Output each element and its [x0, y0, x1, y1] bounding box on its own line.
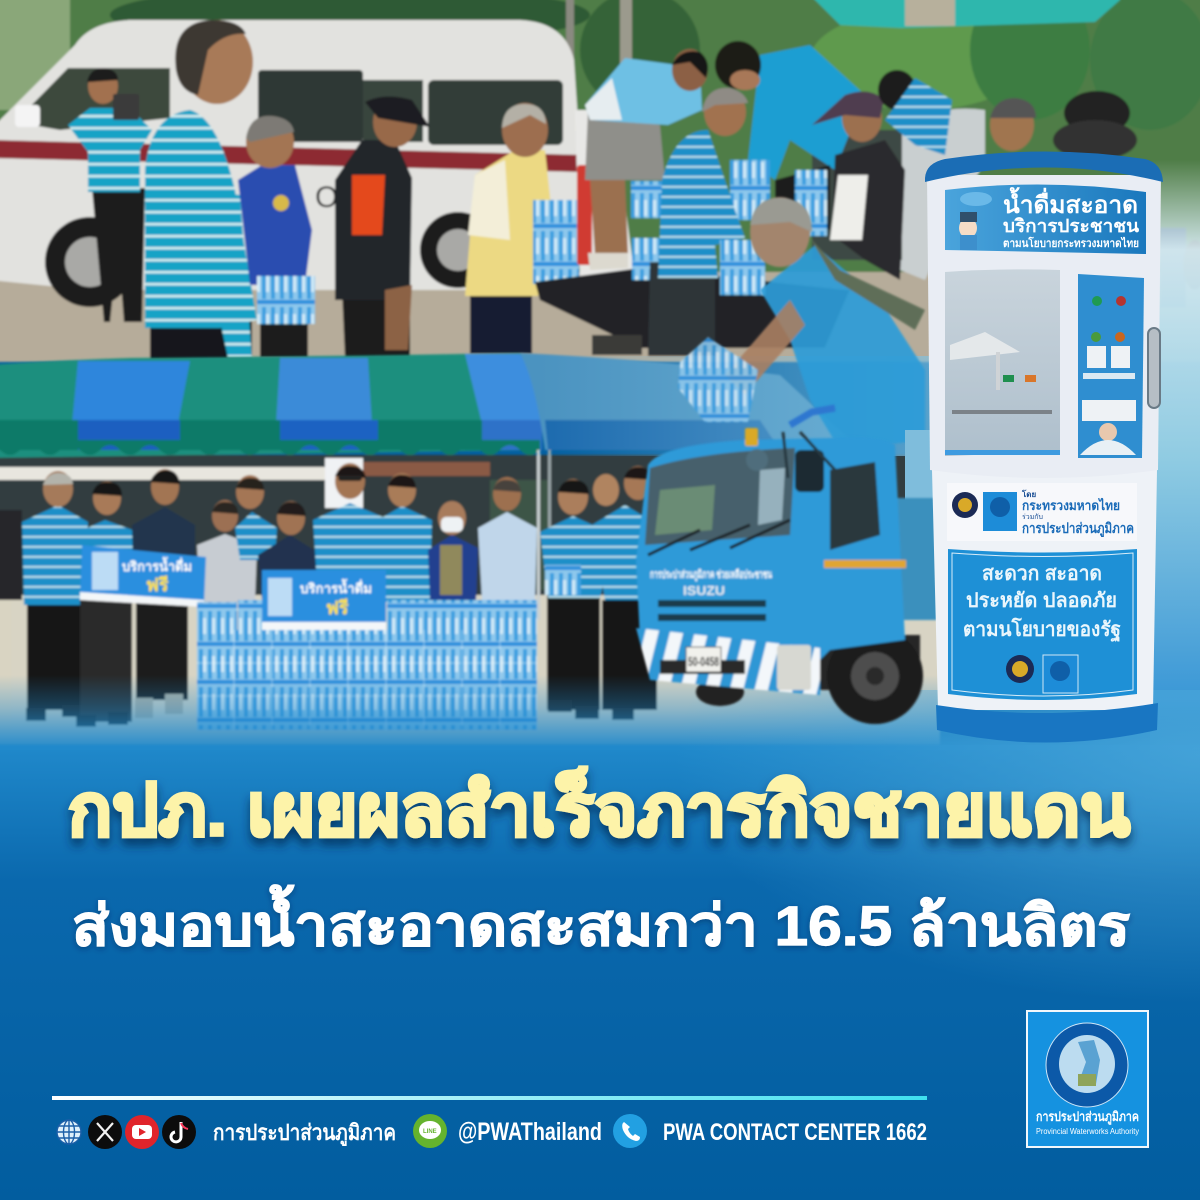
PWA logo box [1027, 1011, 1148, 1147]
striped bumper [636, 628, 820, 695]
kiosk glass window [945, 269, 1060, 456]
ground [0, 272, 1200, 362]
person: man in blue jacket bending [715, 41, 865, 236]
person 2 [72, 481, 138, 722]
person 7 [313, 463, 385, 600]
kiosk lower body [932, 470, 1157, 710]
banner: free drinking water left: บริการน้ำดื่ม [122, 556, 192, 574]
contact centre: PWA CONTACT CENTER 1662 [663, 1119, 927, 1146]
grille [658, 600, 766, 621]
icon: globe [57, 1120, 81, 1144]
person: man in striped shirt [145, 20, 257, 360]
badge [960, 192, 992, 206]
water tanker truck [636, 408, 940, 724]
van [0, 20, 582, 307]
headline: กปภ. เผยผลสำเร็จภารกิจชายแดน [68, 767, 1130, 851]
person: photographer [68, 68, 152, 322]
door window [830, 462, 880, 550]
group of people with banners [0, 463, 657, 730]
person 4 [197, 500, 257, 602]
photo: handover under the tent [0, 353, 940, 745]
sponsor band [947, 483, 1137, 541]
person: man in blue polo carrying water [238, 116, 315, 358]
cab [636, 437, 905, 665]
light blue fade on the right [1150, 160, 1200, 760]
footer divider [52, 1096, 927, 1100]
kiosk base [936, 703, 1158, 742]
licence plate: 50-0458 [688, 654, 719, 669]
person: man in cap and vest [812, 91, 905, 280]
windshield [645, 448, 795, 545]
mirror and roof lamp [745, 408, 835, 492]
slogan sign [948, 549, 1137, 700]
sponsor band: ร่วมกับ [1022, 513, 1043, 521]
door details and orange stripe [824, 560, 906, 568]
water kiosk [925, 152, 1163, 742]
logo emblem [1046, 1023, 1128, 1107]
van: E [376, 181, 396, 214]
pickup truck [535, 109, 985, 355]
tank [895, 498, 940, 620]
person: man on truck bed [585, 49, 708, 280]
page background [0, 745, 1200, 1200]
logo English name: Provincial Waterworks Authority [1036, 1127, 1139, 1136]
door lettering: การประปาส่วนภูมิภาค ช่วยเหลือประชาชน [650, 568, 772, 582]
slogan sign: ตามนโยบายของรัฐ [963, 617, 1121, 643]
banner: free drinking water centre: ฟรี [326, 598, 349, 618]
person: man in striped shirt by tailgate [648, 88, 765, 355]
logo Thai name: การประปาส่วนภูมิภาค [1036, 1109, 1139, 1125]
glow in the upper right of the blue panel [500, 690, 1200, 1020]
mascot [959, 212, 977, 250]
person 5 [235, 475, 277, 560]
header sign [945, 184, 1146, 254]
kiosk handle [1148, 328, 1160, 408]
icon: YouTube [125, 1115, 159, 1149]
icon: LINE [413, 1114, 447, 1148]
person 6 [258, 501, 322, 600]
kiosk top cap [925, 152, 1163, 182]
header sign: บริการประชาชน [1003, 216, 1140, 236]
banner: free drinking water centre [262, 570, 386, 630]
icon: X [88, 1115, 122, 1149]
kiosk upper body [927, 175, 1161, 478]
header sign: น้ำดื่มสะอาด [1003, 186, 1138, 219]
LINE handle: @PWAThailand [458, 1118, 602, 1146]
sponsor band: โดย [1021, 489, 1036, 499]
people behind kiosk [990, 91, 1200, 308]
wipers [648, 520, 790, 555]
person: woman in striped shirt [878, 70, 952, 155]
person: man in cap and black vest [335, 96, 430, 358]
top photo fading over the tent: bald man and water pack [540, 197, 940, 456]
person 3 [132, 469, 195, 700]
person 10 [478, 477, 537, 600]
agency name: การประปาส่วนภูมิภาค [213, 1120, 396, 1147]
icon: LINE: LINE [423, 1129, 437, 1135]
van: OC [315, 181, 360, 214]
photo: unloading drinking water by the van [0, 0, 1200, 362]
subheading: ส่งมอบน้ำสะอาดสะสมกว่า 16.5 ล้านลิตร [72, 885, 1130, 957]
banner: free drinking water left: ฟรี [146, 575, 169, 595]
person 1 [22, 471, 88, 710]
isuzu badge: ISUZU [683, 583, 725, 598]
person at left edge [0, 510, 22, 730]
headlight [777, 645, 811, 690]
person: pickup driver dark [648, 258, 716, 356]
person: bald man lifting water pack [678, 197, 925, 450]
trees and sky [0, 0, 1200, 290]
background behind group [0, 455, 940, 745]
icon: phone [613, 1114, 647, 1148]
banner: free drinking water centre: บริการน้ำดื่ม [300, 578, 372, 596]
fade from photos into the blue panel [0, 675, 1200, 750]
person 8 [378, 473, 432, 602]
kiosk instruction panel [1078, 274, 1144, 458]
person: man in yellow shirt carrying water [465, 103, 579, 354]
person 11 [540, 479, 615, 710]
sponsor band: กระทรวงมหาดไทย [1022, 497, 1120, 513]
person 9 [428, 501, 478, 600]
slogan sign: สะดวก สะอาด [982, 563, 1102, 585]
footer contacts [57, 1114, 927, 1149]
person 12 and 13 [592, 466, 657, 710]
sponsor band: การประปาส่วนภูมิภาค [1022, 520, 1134, 537]
banner: free drinking water left [80, 545, 206, 607]
header sign: ตามนโยบายกระทรวงมหาดไทย [1003, 236, 1139, 250]
icon: TikTok [162, 1115, 196, 1149]
tent canopy [0, 353, 850, 620]
slogan sign: ประหยัด ปลอดภัย [966, 590, 1117, 612]
stacks of bottled water [197, 600, 537, 730]
licence plate [686, 647, 721, 672]
chassis and wheel [696, 628, 923, 724]
shoes [26, 694, 634, 727]
